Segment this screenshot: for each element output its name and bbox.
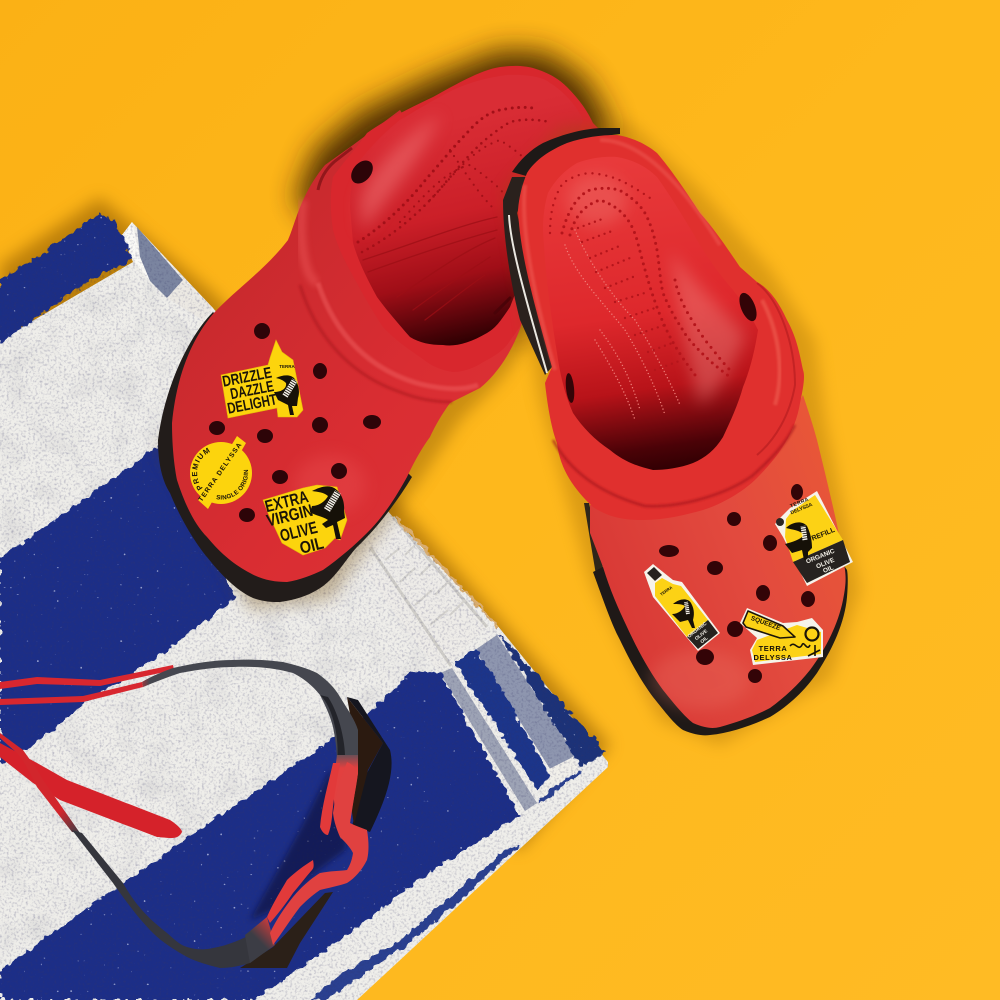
left clog lip (331, 66, 600, 372)
left clog vent holes (209, 156, 381, 522)
towel blue end underlay (0, 219, 128, 336)
goggles lower strap (72, 830, 272, 968)
goggles red strap, upper (0, 665, 174, 689)
goggles red strap, second (0, 682, 143, 705)
left clog body (172, 110, 522, 582)
blue terry speckles (0, 216, 602, 998)
charm: Extra Virgin Olive Oil: OLIVE (278, 518, 319, 545)
goggles shadow (250, 770, 346, 920)
left clog (154, 28, 631, 618)
goggles inner frame (320, 695, 345, 762)
right clog collar seams (524, 140, 795, 506)
right clog footbed highlights (567, 174, 745, 405)
right clog sole strip (584, 503, 605, 577)
charm: Organic Olive Oil refill pouch: DELYSSA (790, 502, 814, 516)
charm: Extra Virgin Olive Oil (263, 485, 347, 558)
goggles red tongue (0, 743, 182, 838)
goggles thin red strap (0, 733, 80, 833)
right clog sole (593, 560, 848, 735)
goggles upper lens (347, 697, 392, 832)
goggles red nose strap (270, 762, 368, 945)
right clog body highlight (650, 650, 750, 710)
heel strap white stripe (509, 215, 547, 373)
right clog footbed (543, 157, 758, 470)
right clog vent holes (564, 290, 815, 683)
charm: Organic olive oil bottle: OIL (699, 635, 709, 645)
charm: Premium Terra Delyssa Single Origin (190, 436, 252, 509)
right clog body (590, 395, 846, 728)
right clog outer collar (518, 135, 804, 520)
goggles red side strap, small (320, 763, 340, 835)
icon: bird (785, 522, 812, 560)
charm: Organic Olive Oil refill pouch: ORGANIC (805, 548, 836, 566)
left clog inner cavity (350, 75, 583, 346)
charm: Organic olive oil bottle (644, 564, 720, 651)
goggles red nose strap, small (267, 860, 314, 923)
charm: Drizzle Dazzle Delight: DAZZLE (229, 378, 275, 403)
charm: Organic Olive Oil refill pouch: REFILL (811, 527, 837, 542)
charm: Squeeze Terra Delyssa (740, 608, 823, 665)
towel grain (0, 214, 608, 1000)
left clog cavity highlight (360, 115, 440, 232)
charm: Drizzle Dazzle Delight (221, 340, 303, 418)
brand mark on drizzle bottle: TERRA (279, 364, 295, 369)
charm: Organic Olive Oil refill pouch: OIL (822, 564, 835, 575)
charm: Extra Virgin Olive Oil: OIL (298, 534, 326, 558)
towel (0, 193, 614, 1000)
goggles lower lens (240, 892, 333, 968)
heel strap (512, 128, 620, 177)
charm: Organic Olive Oil refill pouch: OLIVE (815, 556, 836, 570)
towel shadow (0, 198, 610, 850)
right clog footbed dots (550, 173, 730, 420)
charm: Squeeze Terra Delyssa: TERRA (759, 644, 787, 653)
left clog sole (158, 312, 412, 602)
towel end strips (122, 222, 213, 320)
towel gray and blue end stripes (440, 635, 580, 811)
charm: Premium Terra Delyssa Single Origin: SINGLE ORIGIN (216, 470, 248, 500)
charm: Organic olive oil bottle: OLIVE (694, 628, 710, 642)
charm: Squeeze Terra Delyssa: SQUEEZE (750, 615, 782, 632)
charm: Organic Olive Oil refill pouch: TERRA (789, 497, 810, 510)
goggles upper strap (142, 660, 358, 763)
charm: Squeeze Terra Delyssa: DELYSSA (754, 653, 792, 662)
left clog strap seams (300, 148, 478, 402)
icon: bird (672, 599, 695, 628)
charm: Organic olive oil bottle: TERRA (659, 585, 673, 597)
charm: Extra Virgin Olive Oil: EXTRA (263, 487, 310, 516)
goggles side strap transition (333, 755, 358, 823)
clog shadow (505, 122, 860, 745)
towel white terry shading (0, 295, 420, 942)
charm: Extra Virgin Olive Oil: VIRGIN (265, 501, 315, 531)
charm: Premium Terra Delyssa Single Origin: TERRA DELYSSA (198, 441, 244, 503)
swimming goggles (0, 660, 392, 968)
goggles lower strap transition (245, 917, 275, 963)
left clog body highlight (294, 455, 366, 515)
lower shadow (160, 300, 530, 610)
charm: Drizzle Dazzle Delight: DELIGHT (226, 391, 279, 418)
towel white hem strips (353, 517, 499, 673)
charm: Drizzle Dazzle Delight: DRIZZLE (221, 364, 273, 391)
charm: Organic olive oil bottle: ORGANIC (687, 621, 709, 640)
charm: Premium Terra Delyssa Single Origin: PREMIUM (192, 448, 210, 491)
towel terry bands (0, 213, 607, 1000)
icon: bird with olive branch (310, 486, 345, 539)
heel strap side band (503, 177, 552, 375)
icon: bird with olive branch (274, 375, 299, 415)
left clog insole dots (358, 107, 550, 320)
charm: Organic Olive Oil refill pouch (775, 491, 853, 586)
clog shadow (295, 50, 612, 330)
towel base (0, 222, 608, 1000)
right clog (503, 122, 860, 745)
